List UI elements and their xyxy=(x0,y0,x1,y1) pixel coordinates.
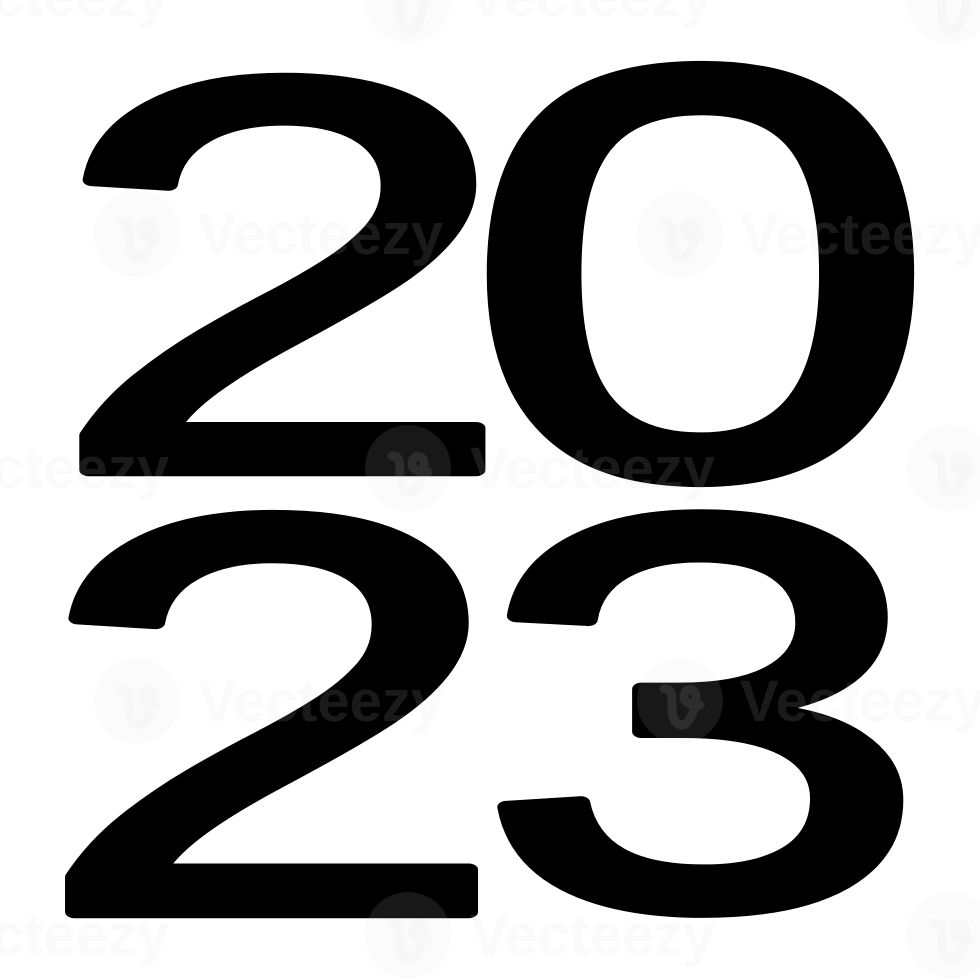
watermark row: bottom: Vecteezy xyxy=(470,903,715,968)
watermark row: lower xyxy=(94,658,980,744)
watermark row: lower: Vecteezy xyxy=(740,669,980,734)
watermark row: upper: Vecteezy xyxy=(198,202,443,267)
watermark row: upper xyxy=(94,191,980,277)
watermark row: bottom xyxy=(0,892,980,978)
watermark row: middle xyxy=(0,425,980,511)
watermark row: upper: Vecteezy xyxy=(740,202,980,267)
watermark row: top xyxy=(0,0,980,43)
watermark row: middle: Vecteezy xyxy=(470,436,715,501)
watermark row: lower: Vecteezy xyxy=(198,669,443,734)
